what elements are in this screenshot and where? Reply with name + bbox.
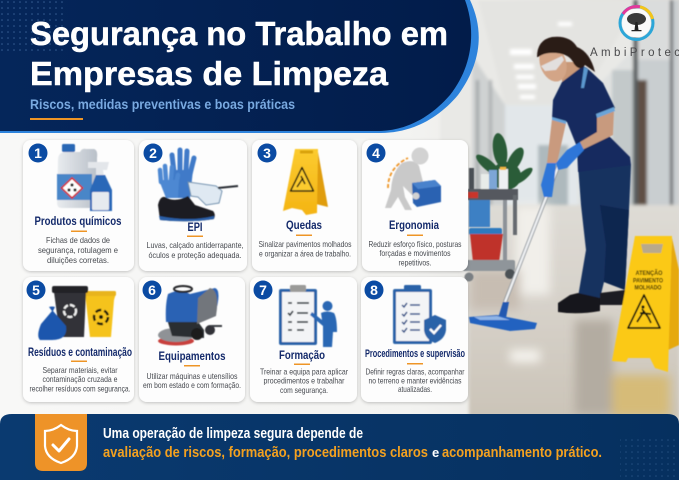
panel: 2 EPI [139,140,247,271]
description: Sinalizar pavimentos molhados [258,239,352,249]
header banner [0,0,479,133]
mop [469,167,558,331]
panel: 4 ergonomia [362,140,468,271]
description: Treinar a equipa para aplicar [260,366,348,376]
trousers [578,165,631,298]
number 8: 8 [370,282,378,298]
goggles [541,56,564,71]
description: Definir regras claras, acompanhar [366,366,465,376]
hair [537,37,595,72]
description [143,371,241,390]
right arm [580,110,614,150]
description [260,366,348,395]
description [368,239,462,268]
number 6: 6 [148,282,156,298]
floor reflections [470,205,670,417]
heading: Ergonomia [389,218,439,232]
heading: Formação [279,348,325,362]
description: segurança, rotulagem e [38,245,118,255]
footer message: acompanhamento prático. [442,444,602,461]
shirt [552,66,631,172]
description [146,240,244,260]
sign text [633,268,663,292]
icon: gloves, shoe and goggles [158,150,238,221]
panel: 8 procedimentos e supervisão [361,277,468,402]
description: diluições corretas. [47,255,109,265]
description: Separar materiais, evitar [42,365,118,375]
panel: 3 quedas [252,140,357,271]
number 2: 2 [149,145,157,161]
heading: EPI [188,220,202,234]
description: repetitivos. [398,258,432,268]
description: procedimentos e trabalhar [264,376,345,386]
footer message: Uma operação de limpeza segura depende de [103,426,363,442]
title: Segurança no Trabalho em [30,15,448,52]
shoes [558,293,600,313]
description: atualizadas. [398,384,432,394]
description: Luvas, calçado antiderrapante, [146,240,244,250]
heading: Produtos químicos [34,214,122,228]
sign text: MOLHADO [634,284,662,292]
footer message [103,426,602,461]
number 1: 1 [34,145,42,161]
sign text: PAVIMENTO [633,278,663,284]
icon: checklist with shield [393,285,446,344]
icon: chemical containers [57,144,112,211]
neck [560,62,583,90]
panel: 5 resíduos e contaminação [23,277,134,402]
left arm [547,119,566,163]
description: com segurança. [280,385,328,395]
sign text: ATENÇÃO [636,268,662,277]
heading: Equipamentos [158,349,226,363]
panel: 1 produtos químicos [23,140,134,271]
number 3: 3 [263,145,271,161]
icon: waste bins and bag [38,286,116,340]
description: Reduzir esforço físico, posturas [368,239,462,249]
description [366,366,465,394]
icon: floor scrubber machine [158,286,222,346]
description: contaminação cruzada e [42,374,118,384]
footer message: avaliação de riscos, formação, procedimentos claros [103,444,428,461]
description [258,239,352,258]
heading: Resíduos e contaminação [28,347,132,359]
icon: clipboard and trainer [279,285,337,347]
logo ring [620,6,653,40]
footer banner [0,414,679,480]
logo [590,6,679,59]
description: forçadas e movimentos [380,248,450,258]
wet floor sign [612,236,679,372]
number 5: 5 [32,282,40,298]
icon: orange shield badge [35,414,87,471]
description [30,365,130,394]
heading: Procedimentos e supervisão [365,348,465,360]
worker [535,37,631,313]
description: Utilizar máquinas e utensílios [146,371,238,381]
panel: 7 formação [250,277,357,402]
description: no terreno e manter evidências [368,376,462,386]
description: Fichas de dados de [46,235,110,245]
number 7: 7 [259,282,267,298]
footer message: e [432,445,439,460]
description: em bom estado e com formação. [143,380,241,390]
face [535,41,571,85]
number 4: 4 [372,145,380,161]
icon: person lifting box [385,148,441,210]
description: óculos e proteção adequada. [148,250,242,260]
gloves [541,163,556,197]
title [30,15,448,92]
cart [463,167,518,282]
title: Empresas de Limpeza [30,55,389,92]
heading: Quedas [286,218,322,232]
description: recolher resíduos com segurança. [30,384,130,394]
logo: AmbiProtec [590,47,679,59]
description: e organizar a área de trabalho. [259,248,351,258]
description [38,235,118,265]
icon: wet floor sign [283,149,328,215]
subtitle: Riscos, medidas preventivas e boas práticas [30,96,295,112]
panel: 6 equipamentos [139,277,245,402]
plant behind cart [473,132,535,190]
